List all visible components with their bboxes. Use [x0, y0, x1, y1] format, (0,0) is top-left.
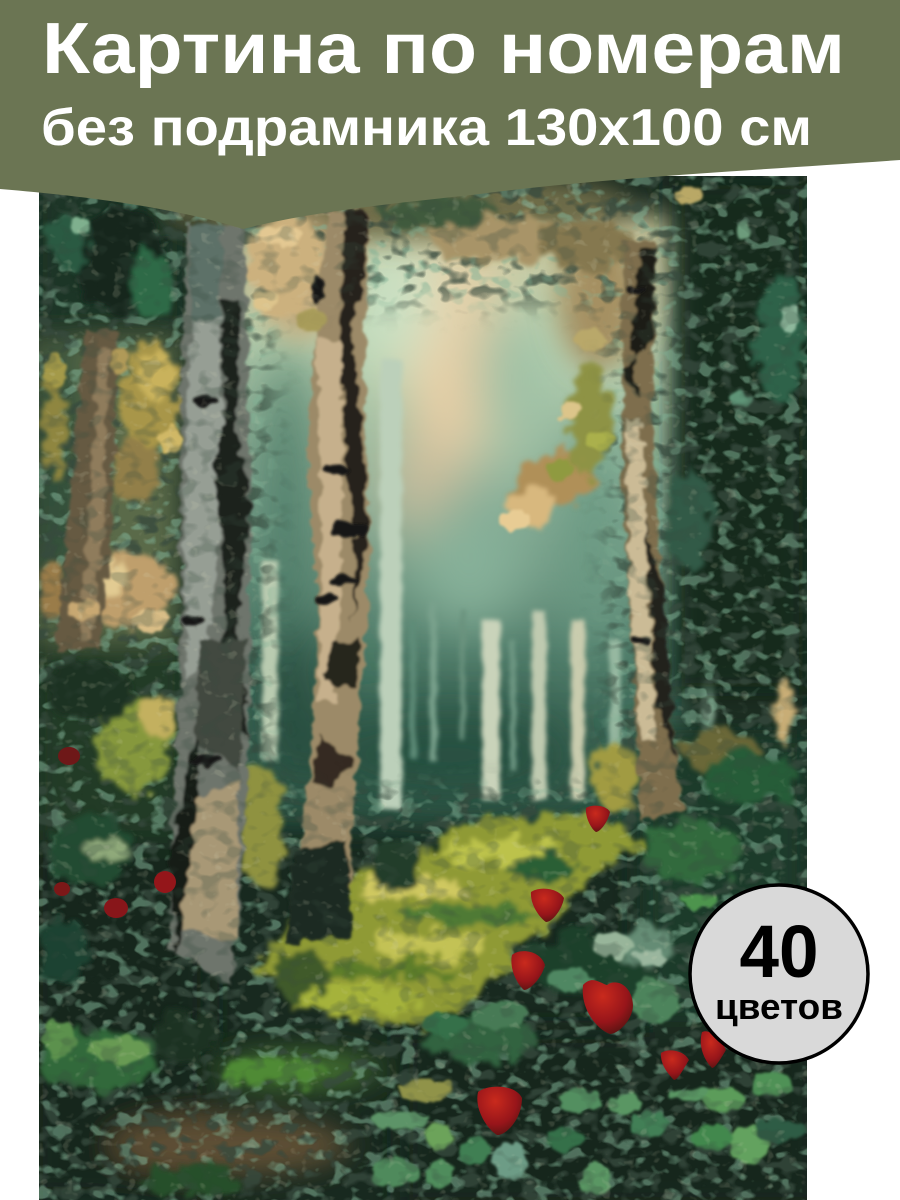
- green foliage masses: [39, 205, 804, 1196]
- strawberry: [104, 898, 128, 918]
- birch trunk right: [620, 240, 684, 820]
- strawberry: [511, 951, 545, 990]
- distant birches: [262, 360, 714, 810]
- misty forest background: [225, 215, 714, 825]
- strawberry: [583, 980, 633, 1034]
- strawberries: [54, 747, 726, 1135]
- trunks: [55, 210, 684, 985]
- sunlit ground: [255, 815, 640, 1030]
- strawberry: [701, 1031, 726, 1068]
- badge: 40 colours: цветов: [715, 986, 843, 1027]
- foliage texture: [39, 176, 807, 1200]
- foreground leaves: [42, 891, 804, 1196]
- strawberry: [661, 1050, 689, 1080]
- badge: 40 colours: [690, 885, 868, 1063]
- header banner: [0, 0, 900, 229]
- strawberry: [154, 871, 176, 893]
- strawberry: [477, 1087, 522, 1135]
- strawberry: [531, 889, 564, 922]
- badge: 40 colours: 40: [740, 910, 818, 993]
- soft colour masses: [30, 170, 820, 1200]
- bark marks: [184, 276, 649, 766]
- strawberry: [58, 747, 80, 765]
- strawberry: [586, 806, 610, 832]
- title: Картина по номерам: [42, 9, 845, 89]
- far left trunk: [55, 330, 118, 650]
- birch trunk left: [170, 224, 250, 985]
- birch trunk centre: [285, 210, 370, 945]
- strawberry: [54, 882, 70, 896]
- golden foliage clusters: [41, 194, 794, 896]
- hanging leaves: [45, 187, 798, 632]
- subtitle: без подрамника 130х100 см: [41, 99, 812, 157]
- painting: forest with birches and strawberries: [30, 170, 820, 1200]
- painterly flecks: [39, 176, 807, 1200]
